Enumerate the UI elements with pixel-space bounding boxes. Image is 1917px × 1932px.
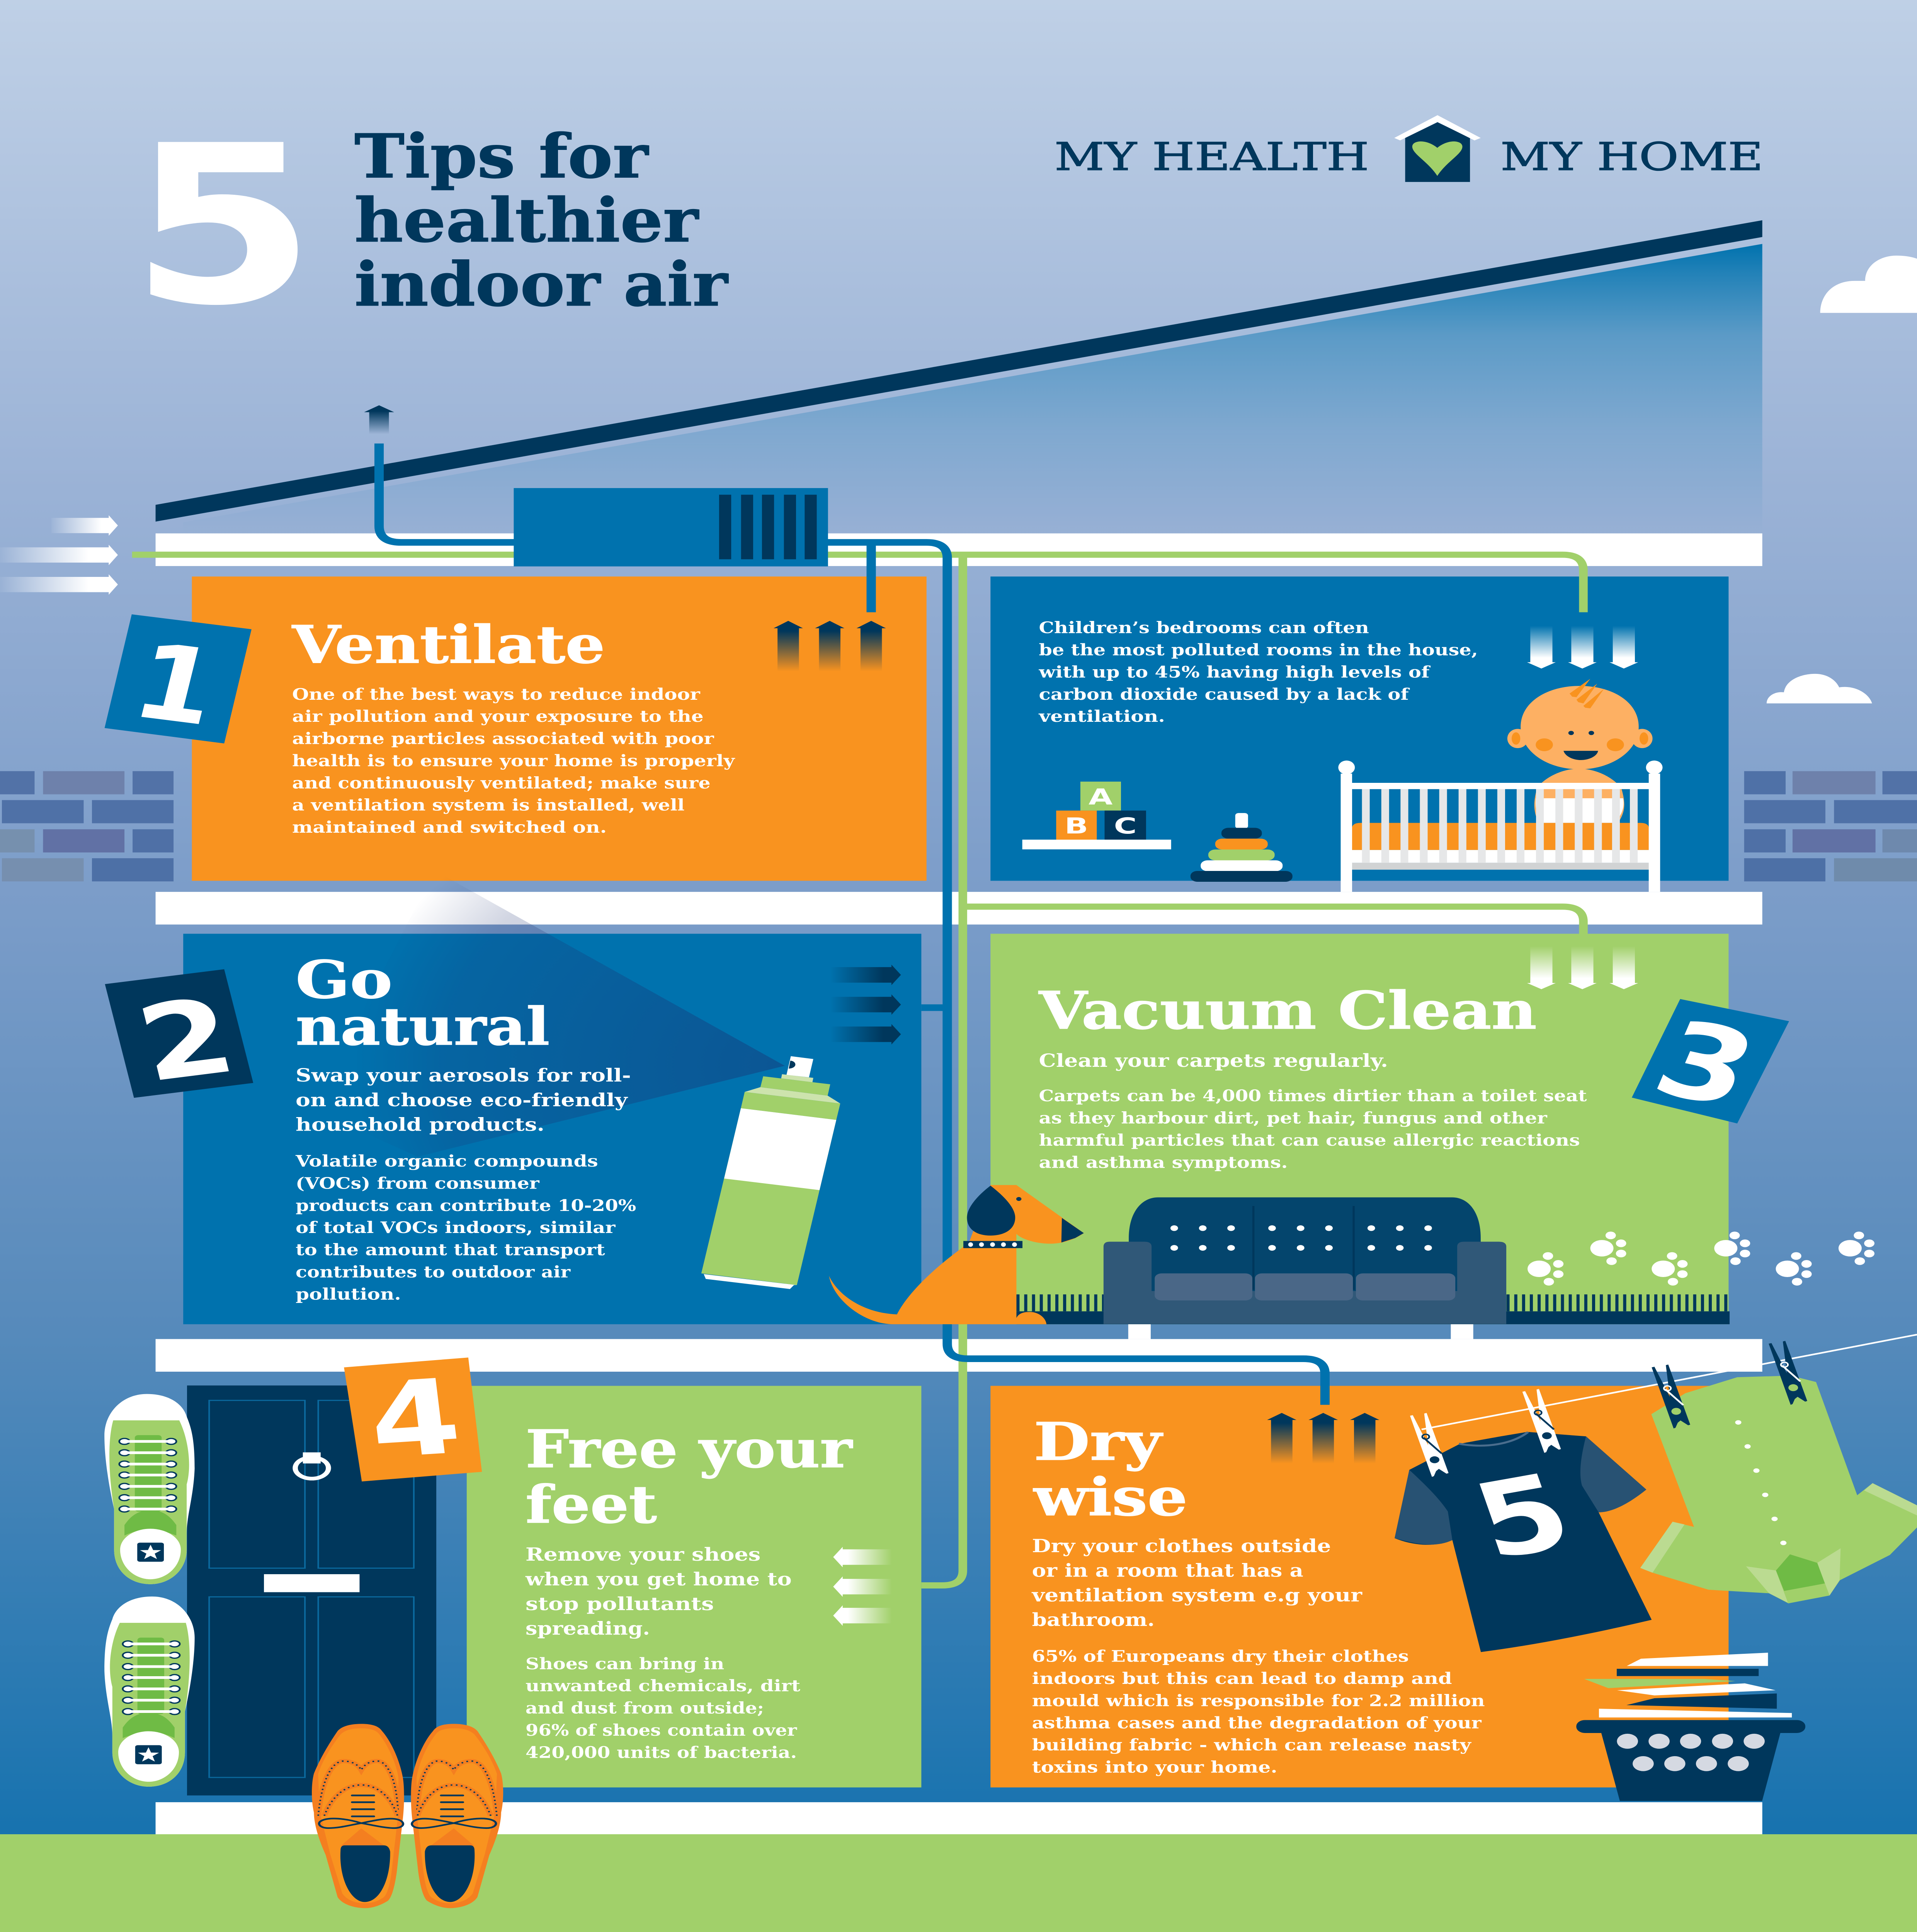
text: go natural body: pollution.: [296, 1285, 401, 1303]
arrows: fresh air down: [1527, 946, 1638, 989]
badge: number 3: 3: [1638, 997, 1773, 1131]
heading: go natural: natural: [296, 997, 550, 1057]
heading: vacuum clean: Vacuum Clean: [1039, 980, 1537, 1041]
logo: My Health My Home: MY HEALTH: [1055, 135, 1369, 179]
icon: navy clothes peg 2: [1769, 1341, 1807, 1405]
blue extract pipe: [379, 444, 1325, 1405]
roof: [156, 220, 1762, 522]
text: ventilate body: [292, 685, 735, 837]
text: ventilate body: air pollution and your exposure to the: [292, 707, 704, 726]
text: go natural body: (VOCs) from consumer: [296, 1174, 540, 1192]
text: dry wise body: mould which is responsible for 2.2 million: [1032, 1691, 1485, 1710]
ground: [0, 1834, 1917, 1932]
ventilation pipes: [132, 444, 1584, 1585]
text: go natural body: [295, 1152, 636, 1303]
text: free your feet body: [526, 1654, 801, 1762]
text: free your feet body: 420,000 units of bacteria.: [526, 1743, 797, 1762]
text: go natural body: to the amount that transport: [296, 1240, 605, 1259]
text: free your feet body: unwanted chemicals, dirt: [526, 1677, 801, 1695]
title text: Tips for: [354, 121, 649, 192]
white floor slabs: [156, 533, 1762, 1835]
text: dry wise body: [1032, 1647, 1485, 1776]
panel 1: ventilate: [192, 577, 927, 881]
icon: alphabet blocks on shelf: C: [1114, 813, 1137, 839]
text: go natural body: contributes to outdoor air: [296, 1262, 571, 1281]
icon: aerosol can: [701, 1056, 840, 1289]
brick wall right: [1744, 771, 1917, 881]
icon: front door: [187, 1386, 436, 1796]
text: vacuum body: Carpets can be 4,000 times dirtier than a toilet seat: [1039, 1087, 1587, 1105]
icon: alphabet blocks on shelf: [1022, 782, 1171, 849]
heading: ventilate: Ventilate: [292, 614, 605, 675]
text: go natural body: products can contribute 10-20%: [296, 1196, 636, 1215]
text: go natural body: Volatile organic compounds: [295, 1152, 598, 1170]
icon: stacking ring toy: [1191, 813, 1293, 882]
arrows: air left: [833, 1547, 892, 1626]
brick wall left: [0, 771, 173, 881]
text: bedrooms fact: ventilation.: [1039, 707, 1165, 726]
icon: navy clothes peg 1: [1652, 1364, 1690, 1429]
panel 5: dry wise: [990, 1386, 1728, 1787]
text: go natural body: of total VOCs indoors, similar: [296, 1218, 616, 1237]
text: dry wise intro: or in a room that has a: [1032, 1560, 1303, 1581]
text: dry wise intro: bathroom.: [1032, 1610, 1155, 1631]
text: free your feet body: 96% of shoes contain over: [526, 1721, 798, 1740]
heading: free your feet: Free your: [526, 1419, 853, 1480]
outgoing air arrows left: [0, 515, 118, 595]
icon: left brogue shoe: [312, 1724, 404, 1908]
text: go natural intro: [296, 1065, 631, 1135]
arrows: upward extract: [1267, 1413, 1379, 1463]
logo: My Health My Home: MY HOME: [1500, 135, 1763, 179]
icon: white clothes peg 1: [1410, 1413, 1449, 1477]
heading: free your feet: [526, 1419, 853, 1535]
icon: alphabet blocks on shelf: B: [1065, 813, 1088, 839]
icon: t-shirt with number 5: [1395, 1432, 1652, 1652]
text: free your feet intro: stop pollutants: [526, 1594, 714, 1614]
arrows: fresh air down: [1527, 626, 1638, 668]
cloud: top right: [1820, 256, 1917, 313]
text: dry wise intro: ventilation system e.g your: [1031, 1585, 1362, 1606]
text: dry wise body: indoors but this can lead to damp and: [1032, 1669, 1452, 1688]
text: bedrooms fact: Children’s bedrooms can often: [1039, 618, 1369, 637]
text: go natural intro: on and choose eco-friendly: [296, 1090, 628, 1111]
roof wall gradient: [183, 244, 1762, 533]
heading: dry wise: wise: [1033, 1467, 1187, 1527]
heading: dry wise: [1033, 1412, 1187, 1527]
text: free your feet intro: when you get home to: [525, 1569, 792, 1590]
title text: indoor air: [354, 249, 729, 320]
icon: green shirt on the line: [1640, 1376, 1917, 1604]
arrows: polluted air right: [830, 965, 901, 1044]
panel 2: go natural: [183, 871, 921, 1324]
title block: [130, 99, 729, 354]
icon: sofa: [1104, 1197, 1506, 1339]
arrow: chimney exhaust: [364, 405, 394, 434]
text: vacuum body: harmful particles that can cause allergic reactions: [1039, 1131, 1580, 1150]
text: bedrooms fact: be the most polluted rooms in the house,: [1039, 640, 1478, 659]
text: dry wise body: asthma cases and the degradation of your: [1032, 1713, 1482, 1732]
text: dry wise body: building fabric - which can release nasty: [1032, 1736, 1472, 1754]
icon: laundry basket with folded clothes: [1576, 1653, 1805, 1801]
text: free your feet body: and dust from outside;: [526, 1699, 764, 1717]
panel 3: vacuum clean: [990, 934, 1730, 1339]
text: ventilate body: and continuously ventilated; make sure: [292, 774, 711, 792]
text: dry wise intro: [1031, 1536, 1362, 1631]
title text: [354, 121, 729, 320]
text: ventilate body: a ventilation system is installed, well: [292, 796, 684, 815]
heading: dry wise: Dry: [1034, 1412, 1163, 1472]
text: bedrooms fact: [1039, 618, 1478, 726]
badge: number 1: 1: [122, 621, 230, 749]
badge: number 2: 2: [126, 975, 246, 1105]
text: vacuum intro: Clean your carpets regularly.: [1039, 1050, 1388, 1071]
text: bedrooms fact: with up to 45% having high levels of: [1039, 663, 1431, 681]
icon: crib: [1338, 760, 1663, 892]
icon: right brogue shoe: [411, 1724, 503, 1908]
text: vacuum body: [1039, 1087, 1587, 1172]
big number 5: 5: [130, 99, 316, 354]
text: dry wise intro: Dry your clothes outside: [1032, 1536, 1331, 1556]
spray cone: [311, 871, 785, 1157]
heading: go natural: [296, 950, 550, 1057]
panel: children's bedroom: [990, 577, 1728, 892]
washing line: [1422, 1335, 1917, 1429]
text: free your feet body: Shoes can bring in: [526, 1654, 724, 1673]
icon: t-shirt with number 5: 5: [1459, 1451, 1586, 1583]
text: go natural intro: Swap your aerosols for roll-: [296, 1065, 631, 1086]
icon: alphabet blocks on shelf: A: [1089, 784, 1112, 810]
text: vacuum body: and asthma symptoms.: [1039, 1153, 1288, 1172]
text: dry wise body: 65% of Europeans dry their clothes: [1032, 1647, 1409, 1666]
heading: free your feet: feet: [526, 1475, 657, 1535]
text: free your feet intro: [525, 1544, 792, 1639]
text: free your feet intro: Remove your shoes: [526, 1544, 760, 1565]
icon: house with heart: [1394, 115, 1481, 182]
icon: baby: [1507, 679, 1653, 823]
text: free your feet intro: spreading.: [526, 1618, 650, 1639]
ventilation unit box: [514, 488, 828, 566]
text: ventilate body: airborne particles associated with poor: [292, 729, 714, 748]
text: go natural intro: household products.: [296, 1114, 544, 1135]
carpet: [1016, 1303, 1730, 1324]
icon: white clothes peg 2: [1522, 1389, 1561, 1453]
text: vacuum body: as they harbour dirt, pet hair, fungus and other: [1039, 1109, 1548, 1127]
icon: sneaker bottom: [104, 1597, 195, 1787]
arrows: upward extract: [774, 621, 886, 671]
text: bedrooms fact: carbon dioxide caused by a lack of: [1039, 685, 1410, 704]
cloud: middle right: [1767, 674, 1872, 703]
icon: paw prints: [1527, 1231, 1874, 1286]
text: ventilate body: One of the best ways to reduce indoor: [292, 685, 701, 704]
title text: healthier: [354, 185, 699, 256]
panel 4: free your feet: [467, 1386, 921, 1787]
logo: My Health My Home: [1055, 115, 1763, 182]
heading: go natural: Go: [296, 950, 392, 1010]
text: ventilate body: health is to ensure your home is properly: [292, 751, 735, 770]
icon: dog: [829, 1185, 1084, 1324]
text: ventilate body: maintained and switched on.: [292, 818, 607, 837]
green supply pipe: [132, 555, 1584, 1585]
badge: number 4: 4: [363, 1356, 467, 1482]
text: dry wise body: toxins into your home.: [1032, 1758, 1277, 1776]
icon: sneaker top: [104, 1394, 195, 1584]
